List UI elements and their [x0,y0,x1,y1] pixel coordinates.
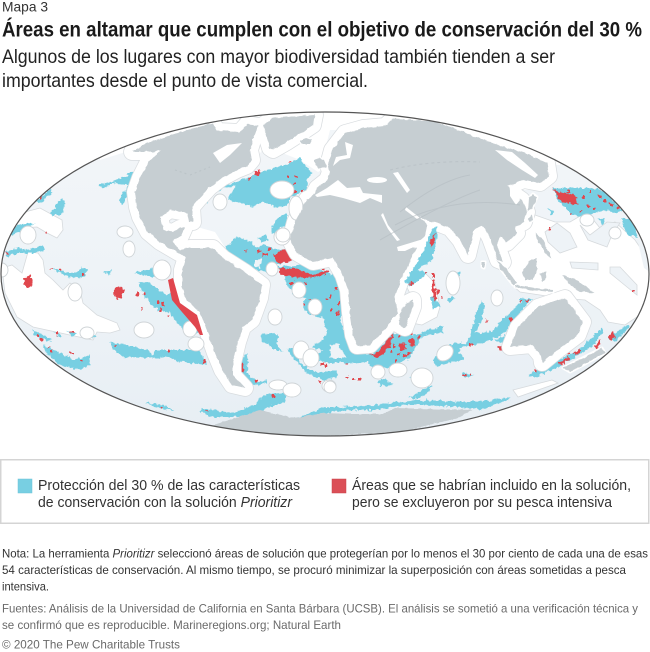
island zones [0,181,621,397]
open ocean white zones [2,110,650,397]
legend: red label: Áreas que se habrían incluido en la solución, [352,477,631,494]
small island arcs [300,138,605,372]
subtitle line 2: importantes desde el punto de vista comercial. [2,70,368,92]
land masses [132,115,605,440]
world map [0,110,650,440]
heading block [2,0,642,92]
note: intensiva. [2,580,49,594]
note: 54 características de conservación. Al mismo tiempo, se procuró minimizar la superposición con áreas sometidas a pesca [2,563,626,577]
inland seas [213,142,538,251]
map outline [1,112,649,436]
pale patches in the western Pacific [545,222,650,295]
Chile excluded strip [168,278,203,335]
protected areas in blue [5,157,638,418]
legend box [1,460,649,523]
ocean background [0,110,650,440]
legend: blue label: Protección del 30 % de las características [38,478,300,494]
legend: blue label: de conservación con la solución Prioritizr [38,495,293,511]
gaps in blue areas [255,258,347,358]
land relief shading [175,162,520,240]
sources [2,602,638,632]
note [2,546,648,594]
Arabian Sea protected area [405,226,437,284]
legend: blue label [38,478,300,511]
copyright: © 2020 The Pew Charitable Trusts [2,638,180,652]
sources: Fuentes: Análisis de la Universidad de California en Santa Bárbara (UCSB). El análisis se sometió a una verificación técnica y [2,602,638,616]
note: Nota: La herramienta Prioritizr seleccionó áreas de solución que protegerían por lo menos el 30 por ciento de cada una de esas [2,546,648,560]
excluded high fishing areas in red [24,169,615,372]
sources: se confirmó que es reproducible. Marineregions.org; Natural Earth [2,618,341,632]
legend: red swatch [332,479,346,493]
subtitle line 1: Algunos de los lugares con mayor biodiversidad también tienden a ser [2,46,555,68]
legend: red label: pero se excluyeron por su pesca intensiva [352,495,613,511]
legend: red label [352,477,631,511]
coastal zone contour [132,115,583,388]
legend: blue swatch [18,479,32,493]
coastal zone white [132,115,583,388]
